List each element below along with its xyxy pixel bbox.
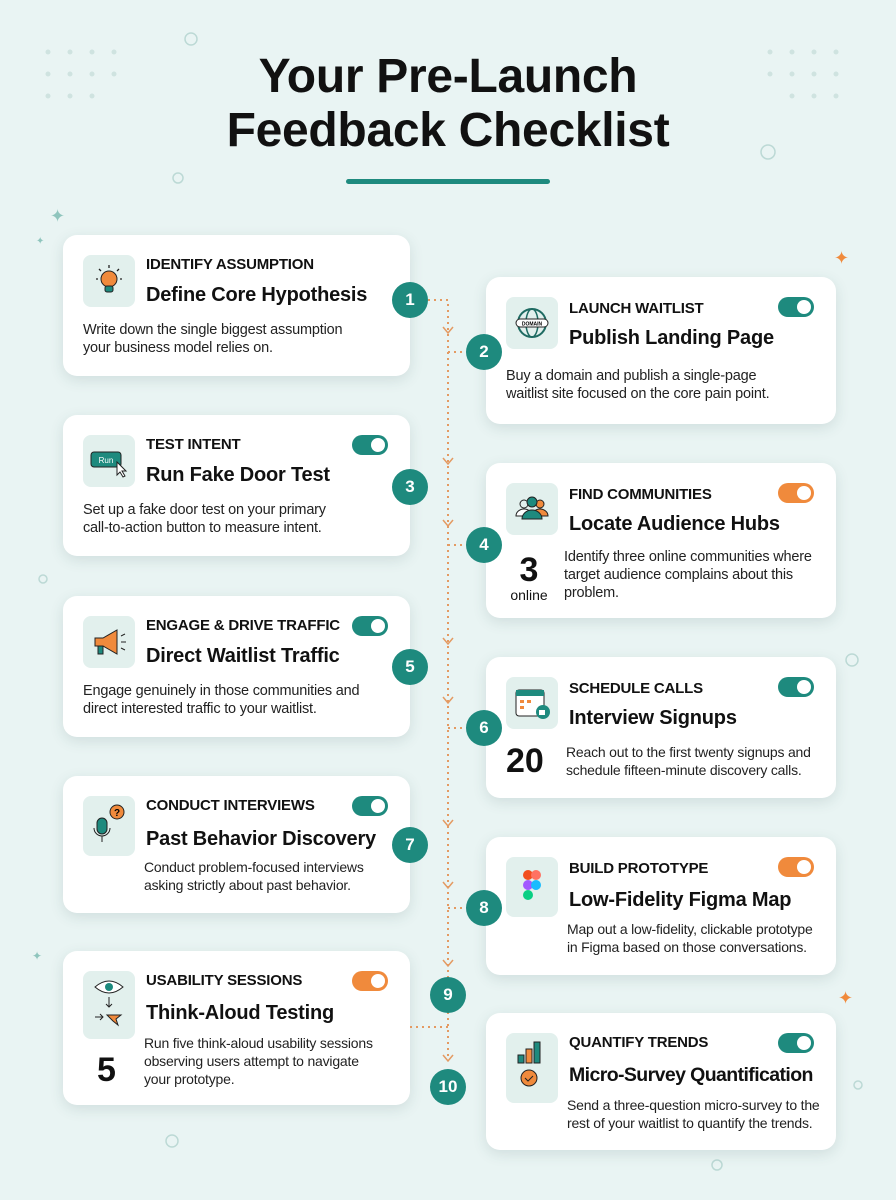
- card 5: direct waitlist traffic: Direct Waitlist Traffic: [146, 645, 340, 667]
- card 9: think-aloud testing: Think-Aloud Testing: [146, 1002, 334, 1024]
- card 2: publish landing page: waitlist site focused on the core pain point.: [506, 386, 769, 402]
- stat: 3 online: [510, 551, 548, 603]
- step numbers: [392, 282, 502, 1105]
- icon: eye and path: [83, 971, 135, 1039]
- card 7: past behavior discovery: [63, 776, 410, 913]
- stat: 3 online: 3: [520, 551, 538, 589]
- decorative background: ✦: [838, 988, 853, 1008]
- card 2: publish landing page: Publish Landing Page: [569, 327, 774, 349]
- stat: 5: 5: [97, 1051, 116, 1089]
- card 6: interview signups: schedule fifteen-minute discovery calls.: [566, 762, 802, 778]
- icon: button cursor: Run: [99, 456, 113, 465]
- card 8: low-fidelity figma map: [486, 837, 836, 975]
- text: 2: [479, 342, 489, 361]
- card 10: micro-survey quantification: [486, 1013, 836, 1150]
- card 9: think-aloud testing: your prototype.: [144, 1071, 234, 1087]
- card 2: publish landing page: LAUNCH WAITLIST: [569, 300, 703, 317]
- card 6: interview signups: Reach out to the first twenty signups and: [566, 744, 811, 760]
- card 10: micro-survey quantification: Send a three-question micro-survey to the: [567, 1097, 820, 1113]
- card 10: micro-survey quantification: QUANTIFY TRENDS: [569, 1034, 708, 1051]
- card 8: low-fidelity figma map: Low-Fidelity Figma Map: [569, 889, 791, 911]
- card 3: fake door test: Set up a fake door test on your primary: [83, 502, 326, 518]
- card 4: locate audience hubs: problem.: [564, 585, 619, 601]
- card 4: locate audience hubs: [486, 463, 836, 618]
- decorative background: ✦: [36, 236, 44, 247]
- card 10: micro-survey quantification: rest of your waitlist to quantify the trends.: [567, 1115, 812, 1131]
- card 2: publish landing page: [486, 277, 836, 424]
- card 6: interview signups: [486, 657, 836, 798]
- card 3: fake door test: call-to-action button to measure intent.: [83, 520, 322, 536]
- card 9: think-aloud testing: [63, 951, 410, 1105]
- icon: people group: [506, 483, 558, 535]
- decorative background: ✦: [50, 206, 65, 226]
- card 7: past behavior discovery: CONDUCT INTERVIEWS: [146, 797, 315, 814]
- text: 5: [405, 657, 415, 676]
- text: 10: [439, 1077, 457, 1096]
- text: 7: [405, 835, 415, 854]
- card 8: low-fidelity figma map: Map out a low-fidelity, clickable prototype: [567, 921, 813, 937]
- title: Your Pre-Launch: [259, 50, 637, 103]
- icon: microphone question: ?: [114, 808, 120, 819]
- card 9: think-aloud testing: USABILITY SESSIONS: [146, 972, 302, 989]
- text: 8: [479, 898, 489, 917]
- text: 1: [405, 290, 415, 309]
- title: [227, 50, 670, 157]
- card 4: locate audience hubs: FIND COMMUNITIES: [569, 486, 712, 503]
- card 9: think-aloud testing: Run five think-aloud usability sessions: [144, 1035, 373, 1051]
- card 1: define core hypothesis: Write down the single biggest assumption: [83, 322, 342, 338]
- icon: calendar video: [506, 677, 558, 729]
- card 8: low-fidelity figma map: BUILD PROTOTYPE: [569, 860, 708, 877]
- text: 9: [443, 985, 453, 1004]
- card 8: low-fidelity figma map: in Figma based on those conversations.: [567, 939, 807, 955]
- text: 3: [405, 477, 415, 496]
- card 7: past behavior discovery: Conduct problem-focused interviews: [144, 859, 364, 875]
- card 7: past behavior discovery: Past Behavior Discovery: [146, 828, 376, 850]
- card 10: micro-survey quantification: Micro-Survey Quantification: [569, 1064, 813, 1086]
- card 1: define core hypothesis: Define Core Hypothesis: [146, 284, 367, 306]
- stat: 20: 20: [506, 742, 544, 780]
- decorative background: ✦: [834, 248, 849, 268]
- card 3: fake door test: TEST INTENT: [146, 436, 240, 453]
- card 2: publish landing page: Buy a domain and publish a single-page: [506, 368, 756, 384]
- icon: microphone question: [83, 796, 135, 856]
- card 1: define core hypothesis: your business model relies on.: [83, 340, 273, 356]
- text: 6: [479, 718, 489, 737]
- card 3: fake door test: [63, 415, 410, 556]
- decorative background: ✦: [32, 949, 42, 963]
- card 5: direct waitlist traffic: [63, 596, 410, 737]
- card 6: interview signups: Interview Signups: [569, 707, 737, 729]
- card 9: think-aloud testing: observing users attempt to navigate: [144, 1053, 359, 1069]
- card 7: past behavior discovery: asking strictly about past behavior.: [144, 877, 351, 893]
- stat: 3 online: online: [510, 587, 548, 603]
- card 5: direct waitlist traffic: ENGAGE & DRIVE TRAFFIC: [146, 617, 340, 634]
- icon: globe domain: [506, 297, 558, 349]
- card 1: define core hypothesis: IDENTIFY ASSUMPTION: [146, 256, 314, 273]
- icon: button cursor: [83, 435, 135, 487]
- card 5: direct waitlist traffic: Engage genuinely in those communities and: [83, 683, 359, 699]
- card 5: direct waitlist traffic: direct interested traffic to your waitlist.: [83, 701, 317, 717]
- card 6: interview signups: SCHEDULE CALLS: [569, 680, 703, 697]
- icon: bar chart check: [506, 1033, 558, 1103]
- card 4: locate audience hubs: Identify three online communities where: [564, 549, 812, 565]
- card 3: fake door test: Run Fake Door Test: [146, 464, 330, 486]
- title: Feedback Checklist: [227, 104, 669, 157]
- card 1: define core hypothesis: [63, 235, 410, 376]
- icon: megaphone: [83, 616, 135, 668]
- card 4: locate audience hubs: target audience complains about this: [564, 567, 793, 583]
- title underline: [346, 179, 550, 184]
- card 4: locate audience hubs: Locate Audience Hubs: [569, 513, 780, 535]
- icon: figma logo: [506, 857, 558, 917]
- icon: light bulb: [83, 255, 135, 307]
- text: 4: [479, 535, 489, 554]
- icon: globe domain: DOMAIN: [522, 322, 543, 328]
